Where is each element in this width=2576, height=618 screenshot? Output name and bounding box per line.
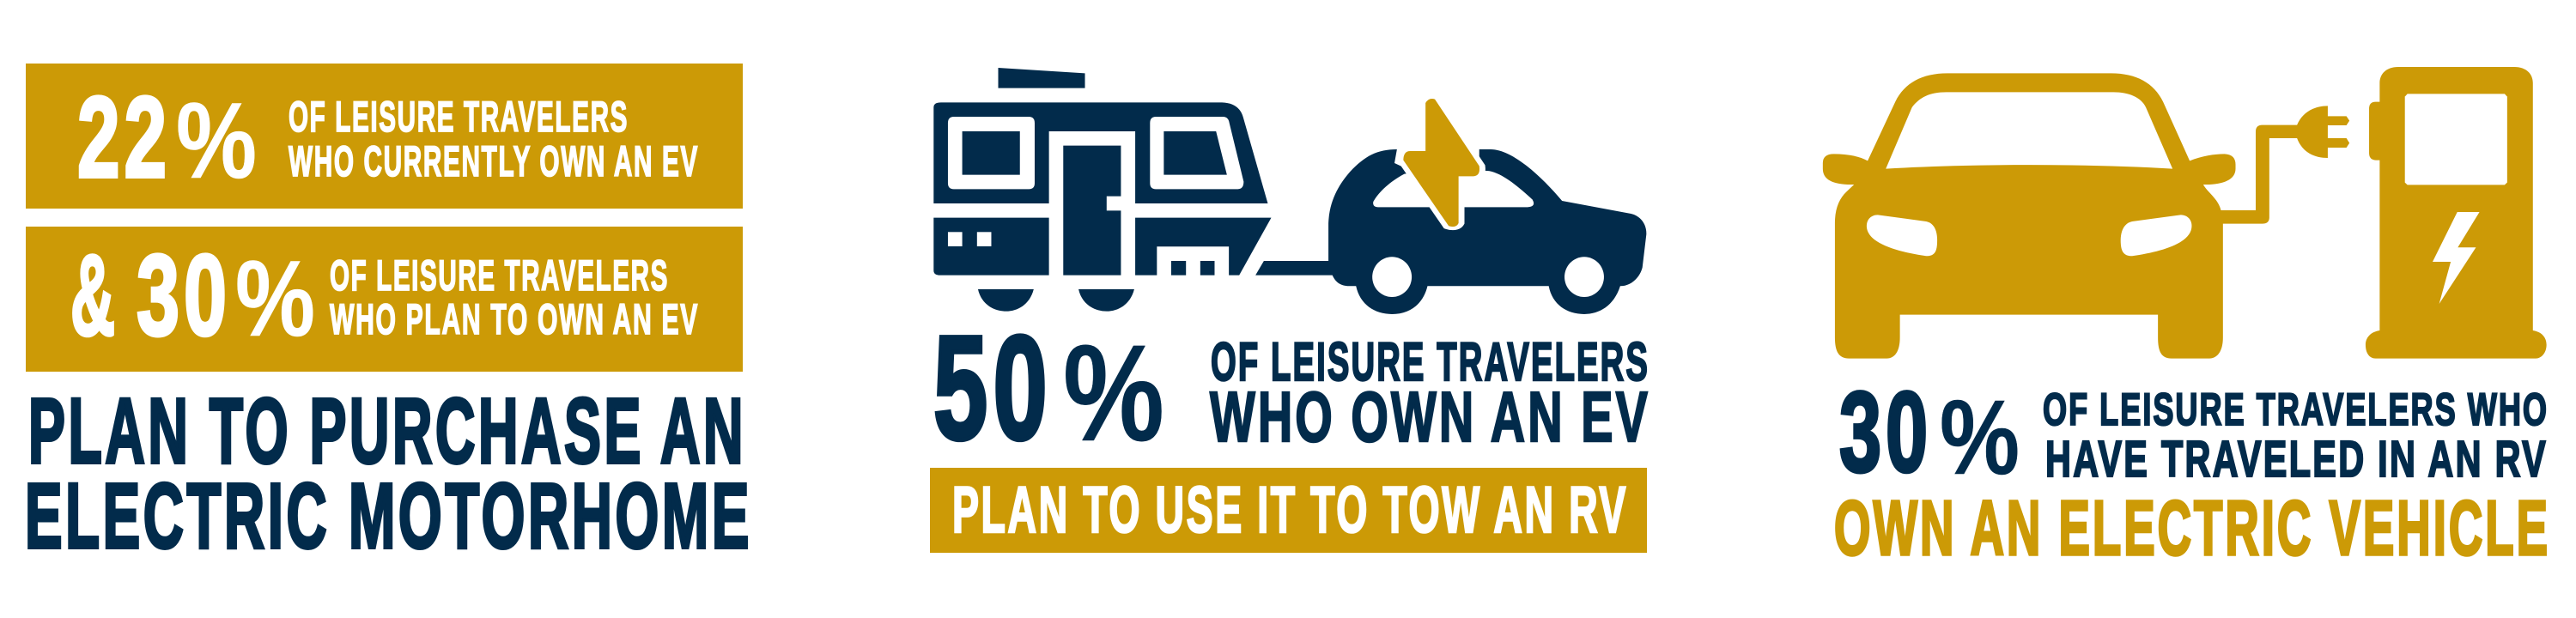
stat: & 30% xyxy=(70,232,315,360)
text: of leisure travelers who own an EV xyxy=(1210,332,1650,457)
stat: & 30%: % xyxy=(235,239,315,359)
text: of leisure travelers who have traveled in an RV xyxy=(2043,385,2549,488)
icon: charging station xyxy=(2366,67,2547,359)
stat: 50%: % xyxy=(1063,316,1164,470)
text: of leisure travelers who currently own an EV: WHO CURRENTLY OWN AN EV xyxy=(289,137,699,185)
text: of leisure travelers who plan to own an EV: OF LEISURE TRAVELERS xyxy=(330,251,669,300)
stat: 22%: 22 xyxy=(77,74,171,202)
text: of leisure travelers who plan to own an EV: WHO PLAN TO OWN AN EV xyxy=(330,295,699,343)
stat: & 30%: & xyxy=(70,232,118,360)
heading: plan to purchase an electric motorhome xyxy=(25,379,752,567)
icon: motorhome towed by electric car xyxy=(933,68,1646,314)
stat: & 30%: 30 xyxy=(137,232,231,360)
stat: 50%: 50 xyxy=(933,306,1053,470)
panel: purchase an electric motorhome xyxy=(25,64,752,567)
text: of leisure travelers who currently own an EV xyxy=(289,93,699,185)
callout: 22 percent currently own an EV xyxy=(26,64,743,209)
icon: motorhome xyxy=(933,68,1271,312)
text: of leisure travelers who own an EV: OF LEISURE TRAVELERS xyxy=(1211,332,1649,392)
text: of leisure travelers who own an EV: WHO OWN AN EV xyxy=(1210,377,1650,457)
panel: tow an RV with an EV xyxy=(930,68,1650,553)
text: of leisure travelers who plan to own an EV xyxy=(330,251,699,343)
icon: car with plug xyxy=(1823,73,2349,359)
icon: electric car xyxy=(1255,99,1646,314)
callout: plan to use it to tow an RV xyxy=(930,468,1647,553)
heading: plan to purchase an electric motorhome: ELECTRIC MOTORHOME xyxy=(25,464,752,567)
panel: RV travelers who own an EV xyxy=(1823,67,2550,572)
callout: 30 percent plan to own an EV xyxy=(26,227,743,372)
icon: lightning bolt xyxy=(1403,99,1479,227)
callout: plan to use it to tow an RV: PLAN TO USE IT TO TOW AN RV xyxy=(952,474,1628,547)
text: of leisure travelers who currently own an EV: OF LEISURE TRAVELERS xyxy=(289,93,629,141)
stat: 30%: % xyxy=(1940,379,2020,497)
icon: car plugged into charging station xyxy=(1823,67,2547,359)
stat: 22%: % xyxy=(176,82,257,201)
stat: 30%: 30 xyxy=(1839,369,1932,496)
heading: plan to purchase an electric motorhome: PLAN TO PURCHASE AN xyxy=(28,379,746,482)
